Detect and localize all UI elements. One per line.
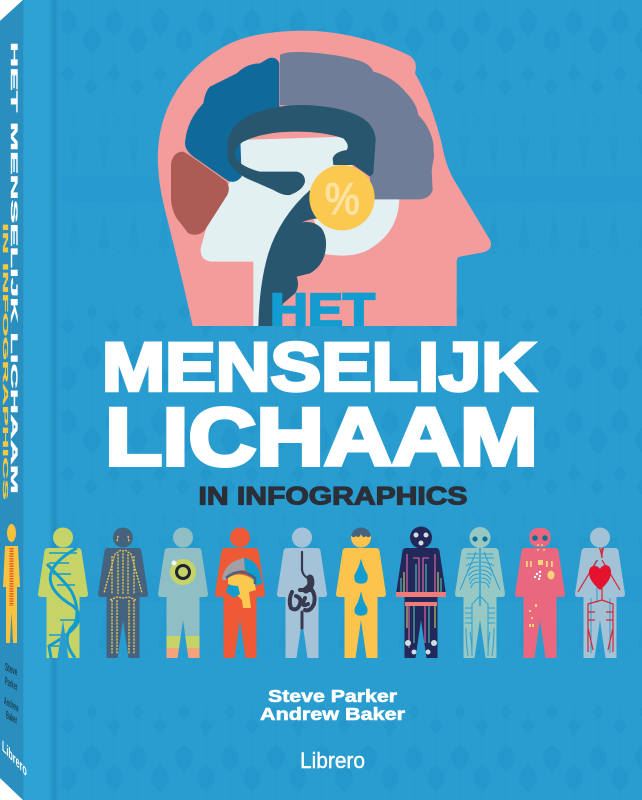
- authors: [260, 686, 405, 724]
- book spine: [0, 0, 27, 800]
- spine authors: Baker: [6, 708, 17, 727]
- percent badge: %: [325, 172, 360, 224]
- spine authors: Parker: [5, 674, 18, 694]
- figure: nervous lines: [98, 528, 148, 658]
- light inner brain area: [201, 137, 399, 326]
- frontal lobe: [185, 58, 279, 182]
- spine authors: Steve: [5, 660, 17, 678]
- title word: HET: HET: [270, 284, 375, 336]
- figure: patterned: [396, 526, 446, 658]
- head illustration: [158, 31, 491, 326]
- figure: water drops: [336, 528, 386, 658]
- author: Steve Parker: Steve Parker: [268, 686, 397, 706]
- percent badge: [309, 165, 375, 230]
- author: Andrew Baker: Andrew Baker: [260, 704, 405, 724]
- parietal lobe: [280, 52, 434, 199]
- title word: LICHAAM: LICHAAM: [105, 392, 538, 483]
- brain stem: [258, 190, 326, 326]
- figure: eye ring: [158, 528, 208, 658]
- row of human figures: [38, 526, 625, 658]
- figure: glands: [515, 528, 565, 658]
- figure: circulatory: [575, 528, 625, 658]
- head silhouette: [158, 31, 491, 326]
- spine title: HET MENSELIJK LICHAAM: [8, 42, 19, 494]
- publisher: Librero: [300, 748, 365, 773]
- figure: DNA: [38, 528, 88, 658]
- figure: brain: [215, 528, 265, 658]
- figure: nervous system: [455, 527, 505, 658]
- corpus ring: [227, 105, 376, 195]
- spine authors: [4, 660, 19, 727]
- subtitle: IN INFOGRAPHICS: [198, 482, 468, 510]
- spine subtitle: IN INFOGRAPHICS: [1, 223, 8, 501]
- title word: MENSELIJK: MENSELIJK: [102, 328, 536, 405]
- figure: digestive: [277, 528, 327, 658]
- spine authors: Andrew: [4, 694, 19, 715]
- spine figure: [3, 524, 20, 643]
- cerebellum block: [171, 152, 229, 235]
- spine publisher: Librero: [2, 736, 27, 780]
